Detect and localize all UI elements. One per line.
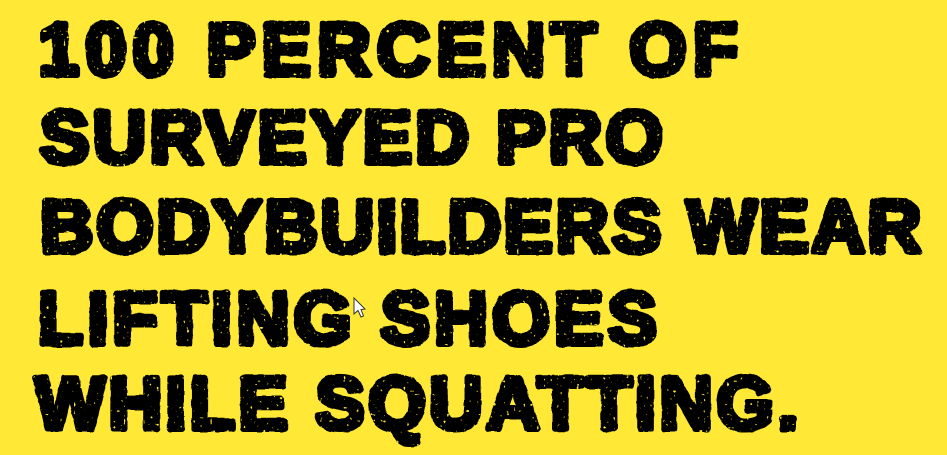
- headline text: SURVEYED PRO: [40, 96, 663, 179]
- headline text: BODYBUILDERS WEAR: [40, 185, 921, 268]
- headline text: 100 PERCENT OF: [38, 8, 738, 91]
- headline text: LIFTING SHOES: [38, 277, 657, 360]
- headline text: WHILE SQUATTING.: [35, 362, 798, 445]
- icon: mouse cursor: [354, 298, 365, 317]
